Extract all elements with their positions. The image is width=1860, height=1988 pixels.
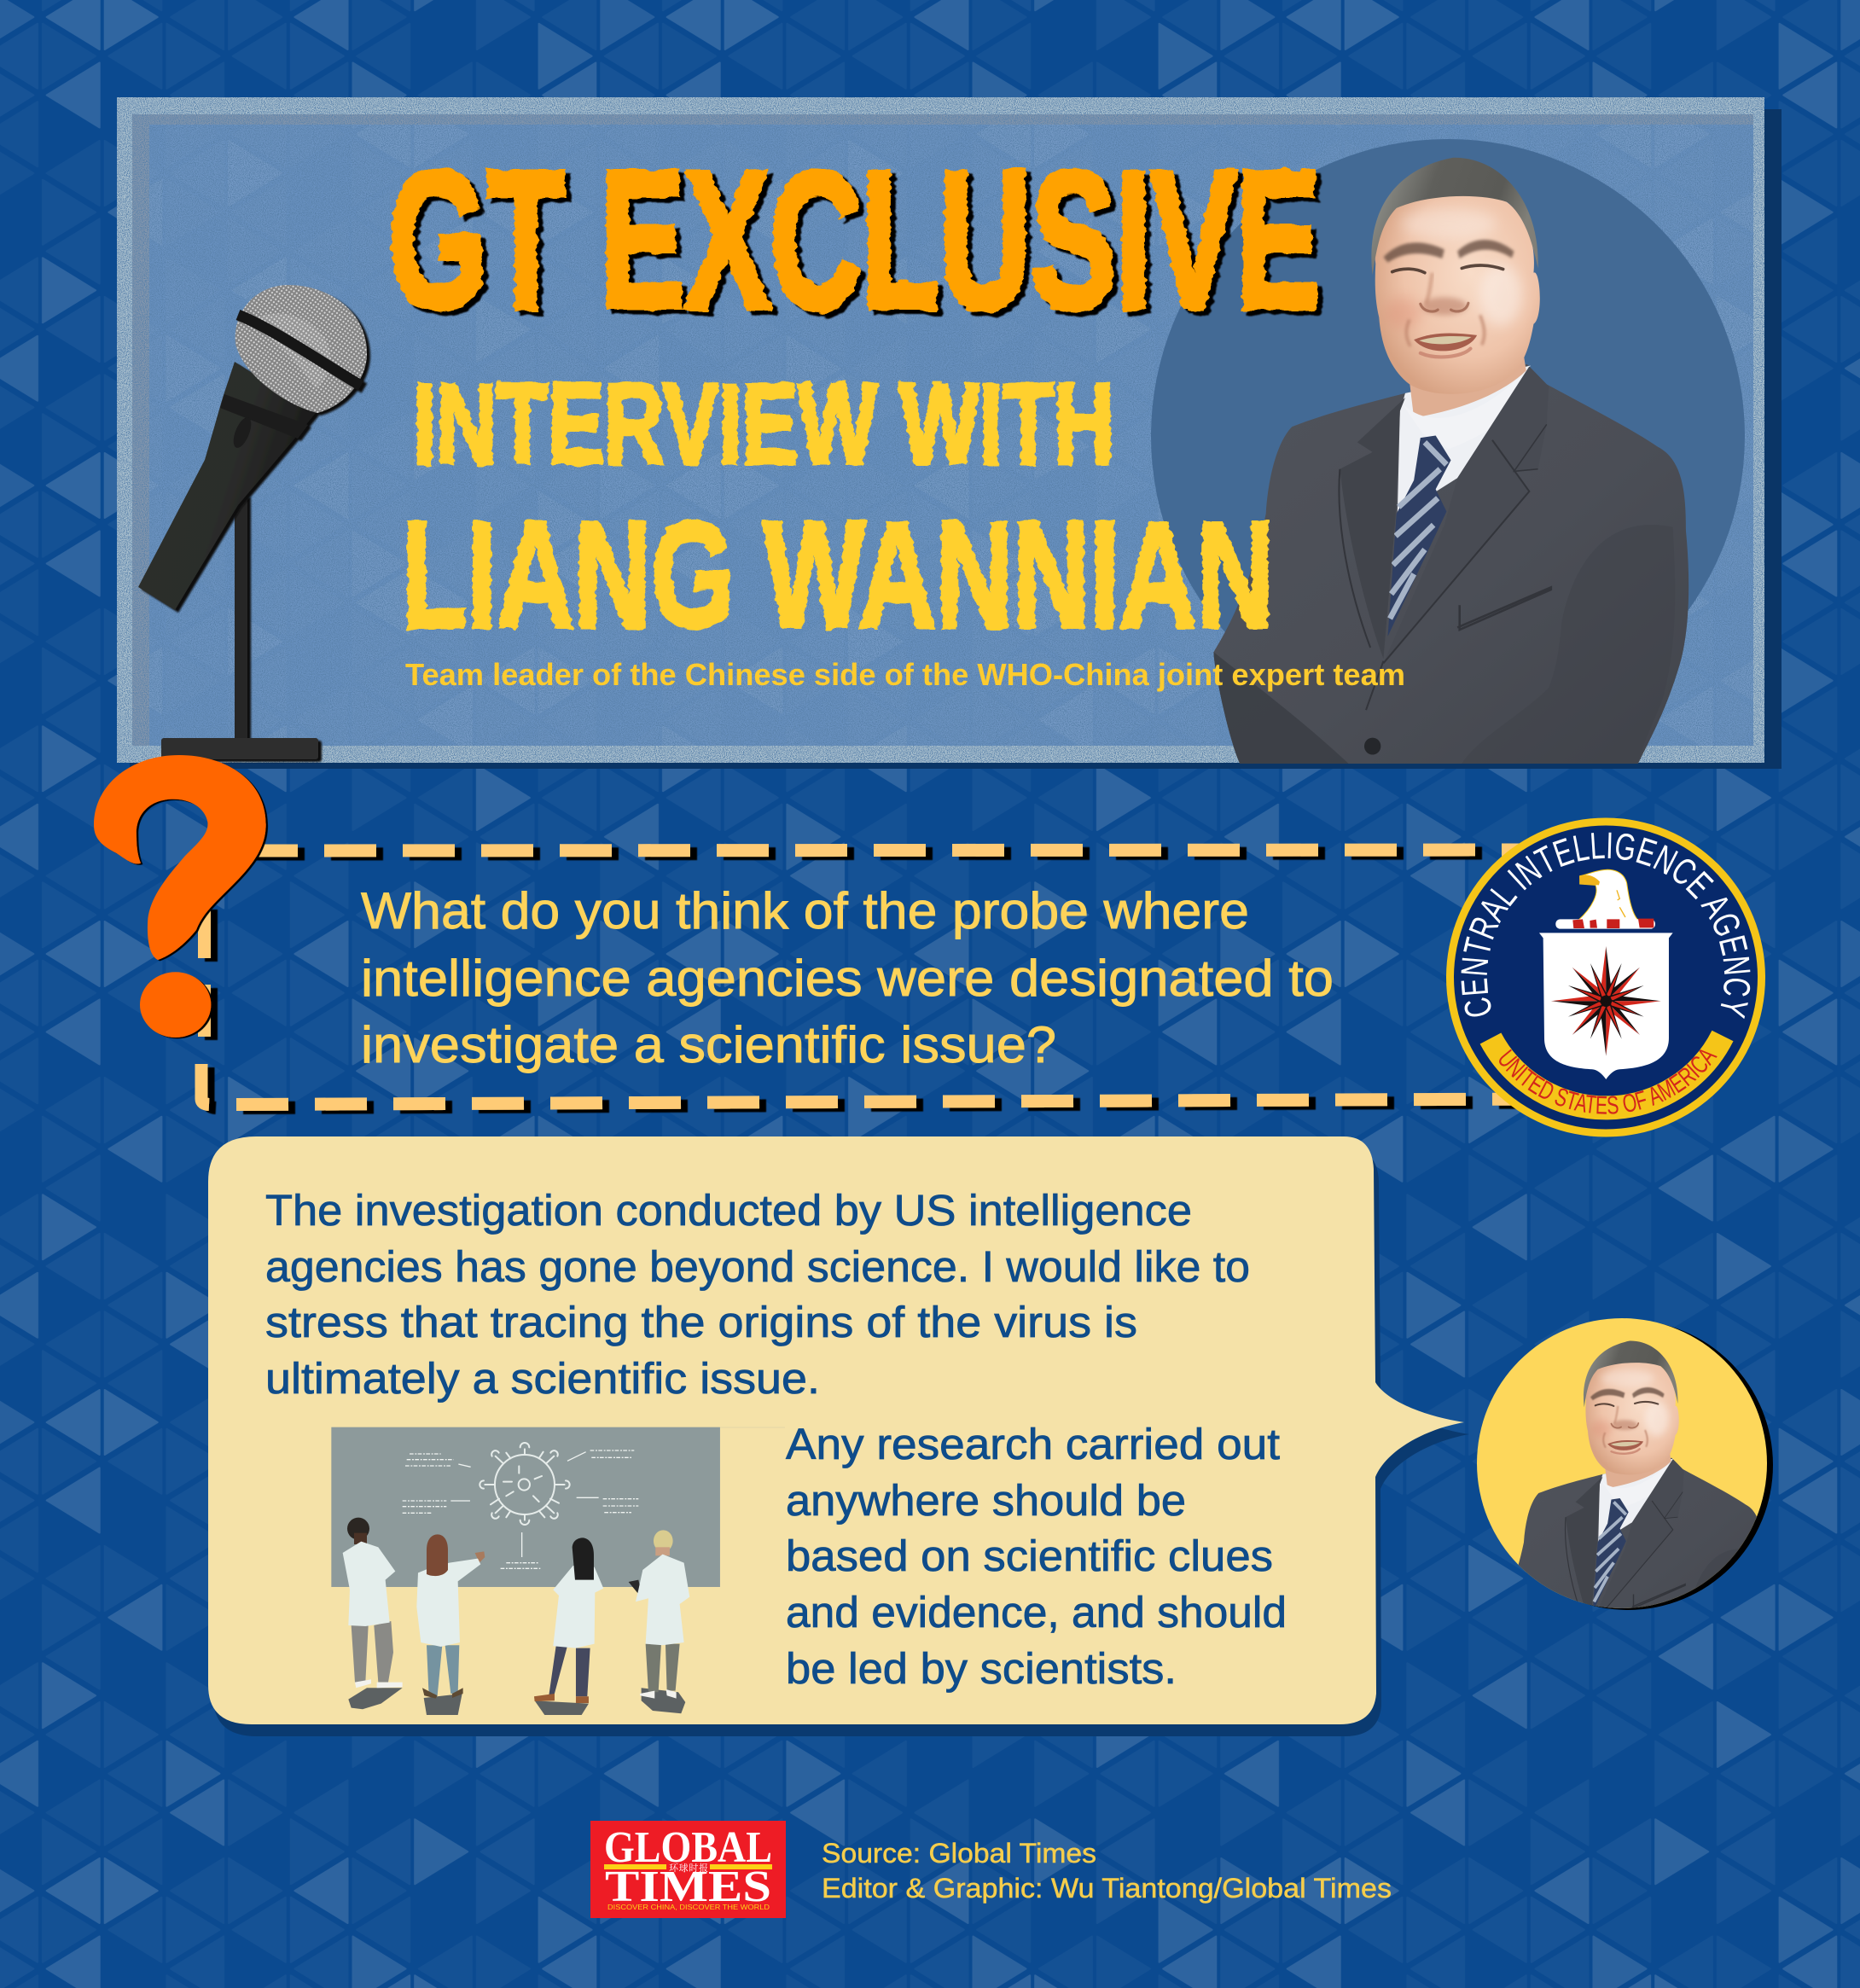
stand [161, 495, 318, 759]
scientist four [629, 1530, 689, 1713]
source credits: Source: Global Times [822, 1838, 1096, 1869]
seal shield, star and eagle [1539, 869, 1673, 1079]
answer paragraph one: The investigation conducted by US intelligence [265, 1186, 1192, 1235]
chalk notes [403, 1450, 638, 1568]
portrait: Liang Wannian on yellow circle [1477, 1318, 1773, 1610]
question text: intelligence agencies were designated to [361, 950, 1334, 1007]
title: Liang Wannian: LIANG WANNIAN [402, 490, 1274, 660]
question text [361, 882, 1334, 1073]
logo: Global Times: TIMES [605, 1863, 771, 1911]
icon: CIA seal [1446, 817, 1765, 1136]
logo: Global Times: GLOBAL [604, 1823, 772, 1872]
title: GT Exclusive: GT EXCLUSIVE [388, 131, 1321, 349]
answer paragraph two: Any research carried out [786, 1420, 1280, 1468]
icon: microphone on stand [138, 285, 367, 759]
source credits: Editor & Graphic: Wu Tiantong/Global Times [822, 1873, 1392, 1904]
logo: Global Times [590, 1821, 786, 1918]
title: Interview with: INTERVIEW WITH [413, 359, 1114, 488]
answer paragraph one [265, 1186, 1250, 1403]
scientist two [416, 1534, 485, 1715]
portrait: Liang Wannian [1213, 158, 1689, 764]
answer paragraph one: ultimately a scientific issue. [265, 1354, 820, 1403]
virus drawing [480, 1443, 570, 1525]
question text: What do you think of the probe where [361, 882, 1249, 939]
subtitle: Team leader of the Chinese side of the WHO-China joint expert team [405, 657, 1405, 692]
scientist three [534, 1538, 603, 1715]
answer paragraph two: be led by scientists. [786, 1644, 1177, 1693]
chalkboard [331, 1427, 785, 1587]
question text: investigate a scientific issue? [361, 1016, 1056, 1073]
panel: answer speech bubble [208, 1136, 1469, 1736]
logo: Global Times: 环球时报 [669, 1862, 708, 1874]
seal ribbon: UNITED STATES OF AMERICA [1499, 1049, 1718, 1114]
answer paragraph one: stress that tracing the origins of the virus is [265, 1298, 1137, 1346]
mic body [138, 285, 367, 610]
panel: question dashed frame [201, 850, 1544, 1104]
panel: header banner [117, 97, 1782, 769]
answer paragraph one: agencies has gone beyond science. I would like to [265, 1242, 1250, 1291]
scientist one [343, 1518, 403, 1709]
illustration: scientists at chalkboard [331, 1427, 785, 1715]
answer paragraph two: and evidence, and should [786, 1588, 1287, 1636]
source credits [822, 1838, 1392, 1904]
answer paragraph two: anywhere should be [786, 1476, 1186, 1525]
answer paragraph two [786, 1420, 1287, 1693]
icon: orange question mark [94, 755, 266, 1038]
answer paragraph two: based on scientific clues [786, 1532, 1273, 1580]
portrait backdrop circle [1151, 139, 1745, 733]
seal ring text: CENTRAL INTELLIGENCE AGENCY [1461, 833, 1751, 1019]
logo: Global Times: DISCOVER CHINA, DISCOVER THE WORLD [607, 1904, 770, 1911]
